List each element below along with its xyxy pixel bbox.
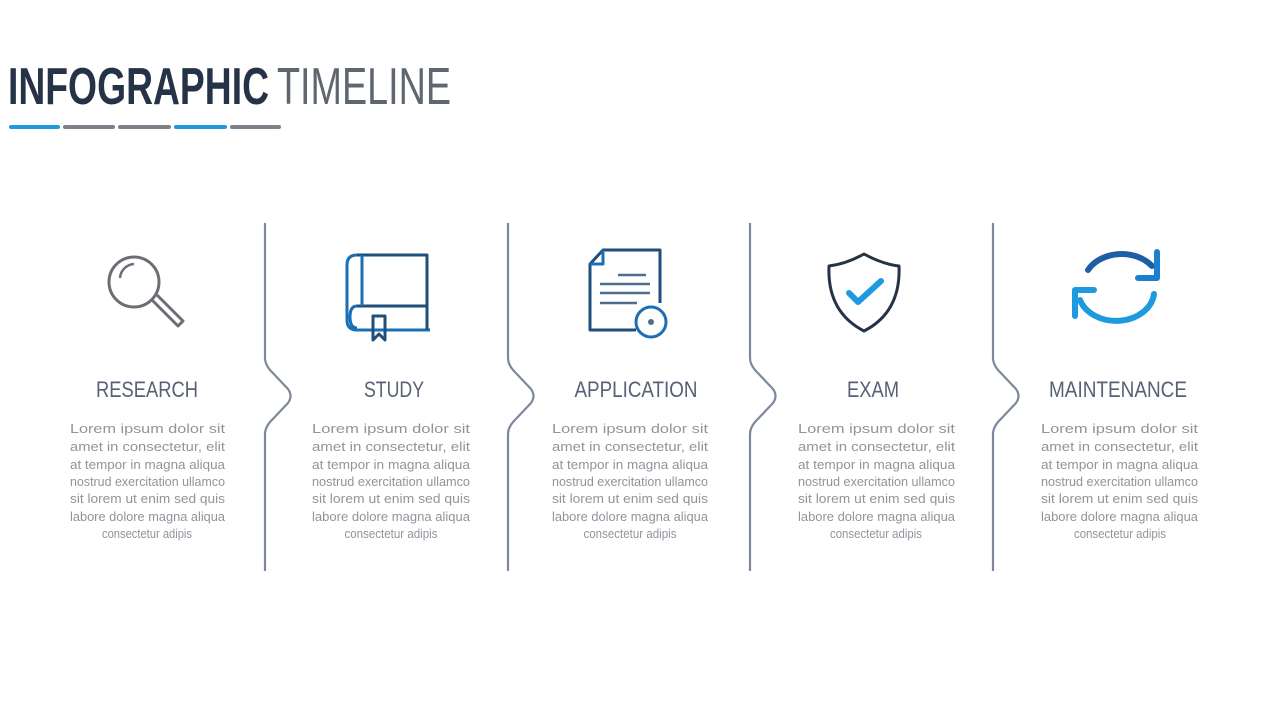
column 3: application: at tempor in magna aliqua (552, 458, 708, 472)
column 4: exam: amet in consectetur, elit (798, 440, 956, 454)
column 4: exam: sit lorem ut enim sed quis (798, 492, 955, 506)
title: TIMELINE (277, 58, 451, 116)
column 3: application: APPLICATION (574, 377, 698, 402)
column 4: exam (798, 377, 956, 541)
icon: document (590, 250, 666, 337)
column 4: exam: EXAM (847, 377, 899, 402)
column 1: research: Lorem ipsum dolor sit (70, 422, 226, 436)
column 1: research (70, 377, 226, 541)
column 4: exam: Lorem ipsum dolor sit (798, 422, 956, 436)
column 1: research: RESEARCH (96, 377, 198, 402)
column 5: maintenance: labore dolore magna aliqua (1041, 510, 1198, 524)
column 3: application: labore dolore magna aliqua (552, 510, 708, 524)
column 2: study (312, 377, 471, 541)
column 1: research: consectetur adipis (102, 527, 192, 541)
column 4: exam: at tempor in magna aliqua (798, 458, 955, 472)
dividers (265, 223, 1018, 571)
title underline segments (11, 125, 279, 129)
column 3: application: sit lorem ut enim sed quis (552, 492, 708, 506)
column 1: research: nostrud exercitation ullamco (70, 475, 225, 489)
column 2: study: amet in consectetur, elit (312, 440, 471, 454)
column 4: exam: nostrud exercitation ullamco (798, 475, 955, 489)
icon: book (347, 255, 430, 340)
icon: refresh (1075, 252, 1157, 321)
column 2: study: consectetur adipis (344, 527, 438, 541)
column 5: maintenance: sit lorem ut enim sed quis (1041, 492, 1198, 506)
column 5: maintenance: at tempor in magna aliqua (1041, 458, 1198, 472)
column 5: maintenance: consectetur adipis (1074, 527, 1166, 541)
column 5: maintenance: MAINTENANCE (1049, 377, 1187, 402)
column 2: study: sit lorem ut enim sed quis (312, 492, 470, 506)
title: INFOGRAPHIC (8, 58, 269, 116)
column 1: research: labore dolore magna aliqua (70, 510, 225, 524)
column 1: research: sit lorem ut enim sed quis (70, 492, 225, 506)
column 2: study: Lorem ipsum dolor sit (312, 422, 471, 436)
column 2: study: labore dolore magna aliqua (312, 510, 470, 524)
column 1: research: amet in consectetur, elit (70, 440, 226, 454)
icon: magnifier (109, 257, 183, 326)
column 5: maintenance: amet in consectetur, elit (1041, 440, 1199, 454)
column 2: study: STUDY (364, 377, 424, 402)
column 3: application: Lorem ipsum dolor sit (552, 422, 709, 436)
column 3: application: amet in consectetur, elit (552, 440, 709, 454)
column 3: application: nostrud exercitation ullamco (552, 475, 708, 489)
column 2: study: nostrud exercitation ullamco (312, 475, 470, 489)
column 4: exam: consectetur adipis (830, 527, 922, 541)
column 5: maintenance (1041, 377, 1199, 541)
column 3: application (552, 377, 709, 541)
column 2: study: at tempor in magna aliqua (312, 458, 470, 472)
column 4: exam: labore dolore magna aliqua (798, 510, 955, 524)
icon: shield (829, 254, 899, 331)
column 5: maintenance: Lorem ipsum dolor sit (1041, 422, 1199, 436)
column 3: application: consectetur adipis (584, 527, 676, 541)
column 1: research: at tempor in magna aliqua (70, 458, 225, 472)
column 5: maintenance: nostrud exercitation ullamco (1041, 475, 1198, 489)
